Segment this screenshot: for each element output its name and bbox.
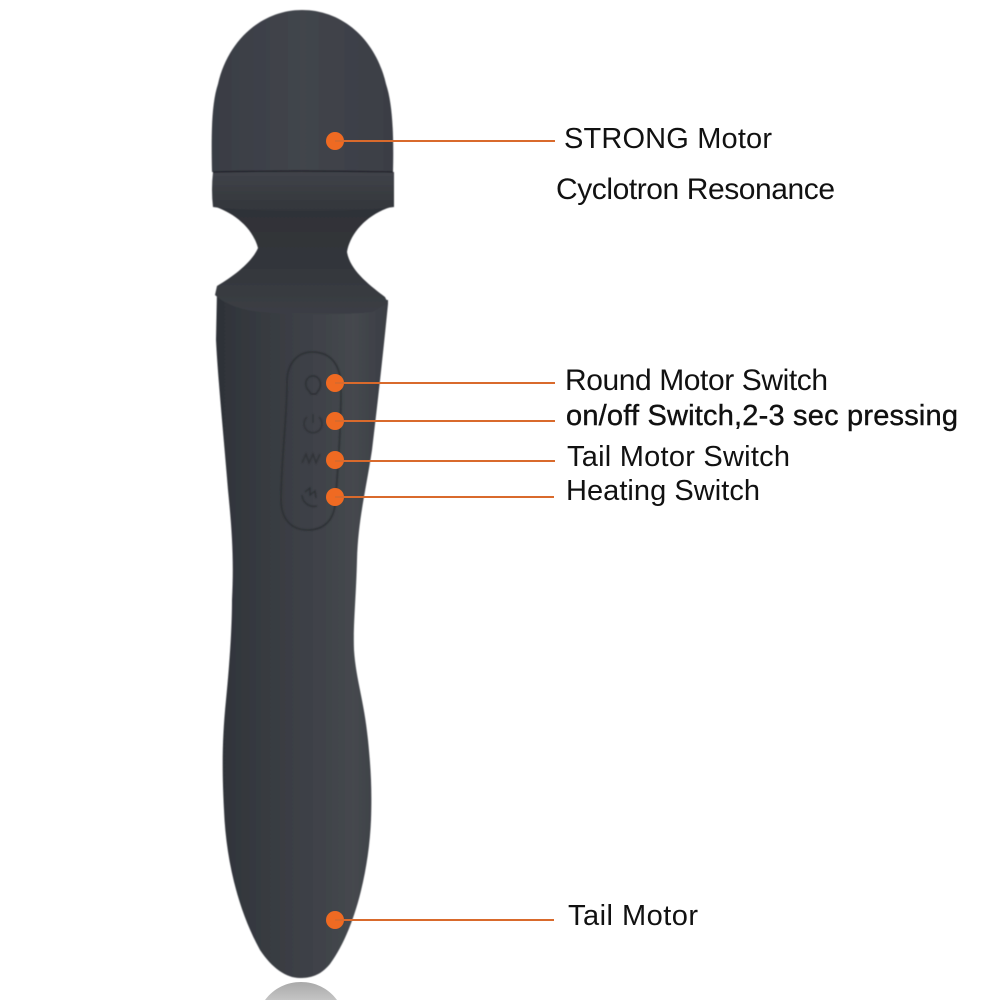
product: wand massager [212,10,394,978]
head collar band [212,172,394,211]
callout: heating switch: Heating Switch [566,475,760,507]
icon: tail motor waves [302,454,320,463]
callout: tail motor switch [326,441,790,473]
icon: power [304,414,322,433]
control panel with button icons [281,352,341,530]
reflection of the device tip [265,982,337,1000]
label: cyclotron resonance: Cyclotron Resonance [556,173,835,206]
icon: heating [302,488,317,506]
control panel outline [281,352,341,530]
callout: round motor switch [326,364,828,397]
neck and shoulder [213,206,394,314]
callout: on/off switch: on/off Switch,2-3 sec pressing [566,400,958,432]
callout: tail motor [326,900,698,932]
callout: strong motor: STRONG Motor [564,123,772,155]
icon: round motor [306,376,320,394]
motor head dome [212,10,393,172]
callout: tail motor: Tail Motor [568,900,698,932]
seam between dome and band [213,171,393,172]
callout: strong motor [326,123,772,155]
callout: round motor switch: Round Motor Switch [565,364,828,397]
callout: heating switch [326,475,760,507]
callout: tail motor switch: Tail Motor Switch [567,441,790,473]
callout: on/off switch [326,400,958,432]
wand handle [216,290,388,978]
